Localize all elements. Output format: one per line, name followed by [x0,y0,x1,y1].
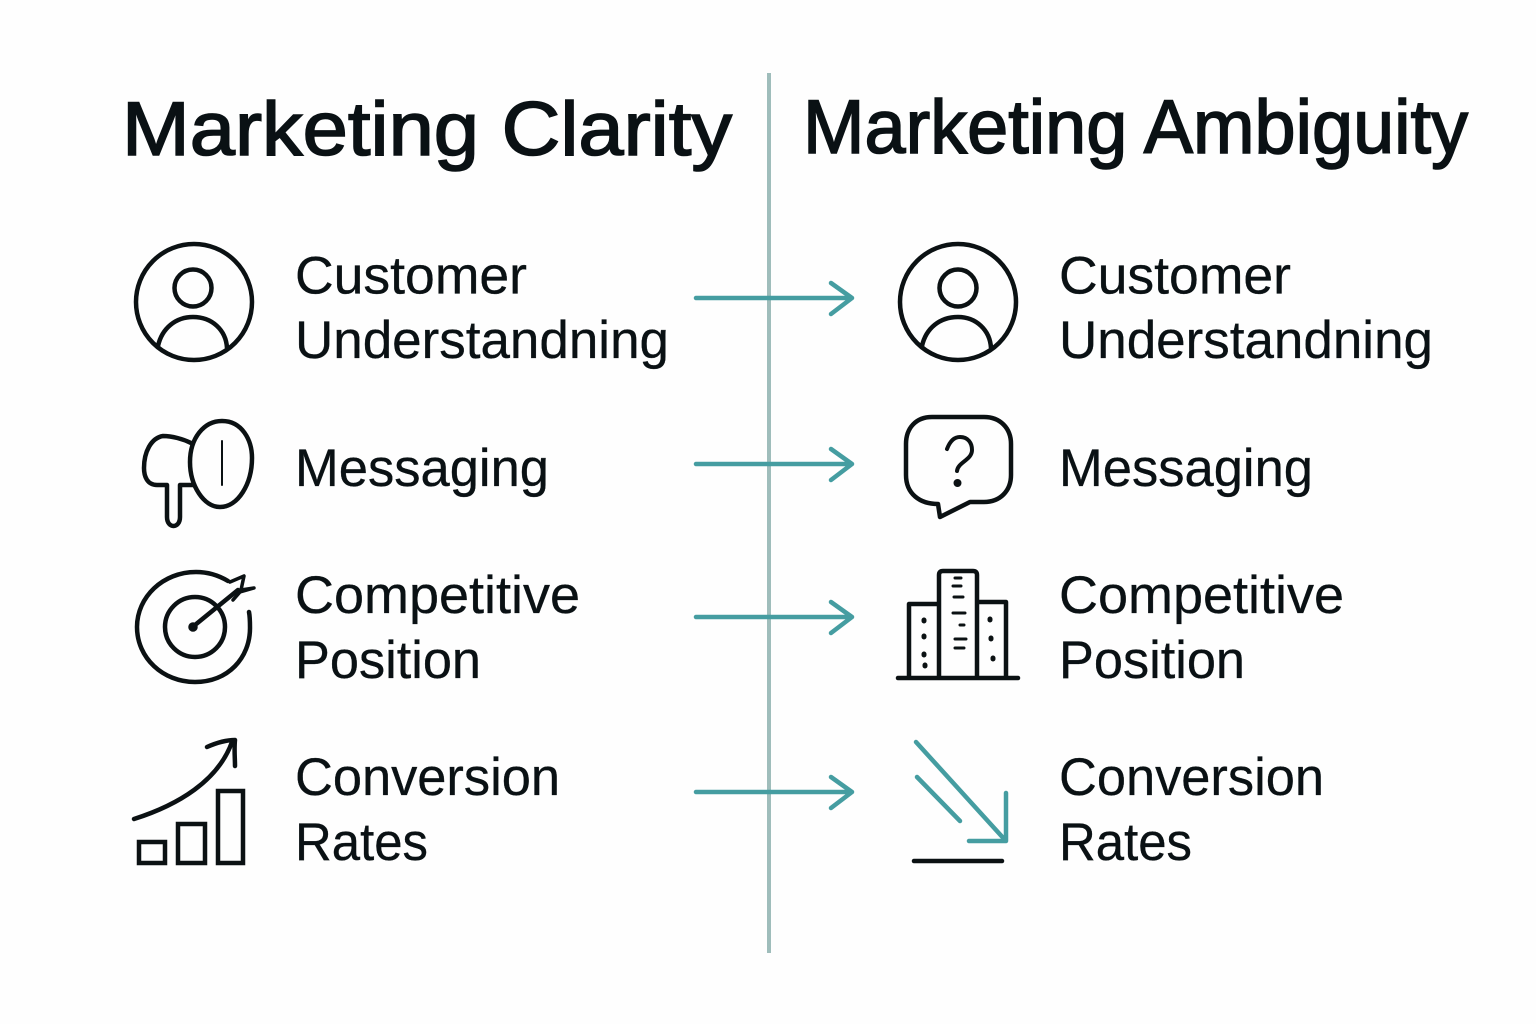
label: Customer Understandning [295,246,669,370]
label: Conversion Rates [295,748,560,872]
label: Conversion Rates: Rates [1059,813,1192,872]
label: Conversion Rates: Rates [295,813,428,872]
label: Messaging: Messaging [1059,439,1313,498]
panel: clarity column [134,244,669,872]
label: Competitive Position: Competitive [295,566,580,625]
label: Customer Understandning: Understandning [1059,311,1433,370]
label: Messaging: Messaging [295,439,549,498]
title: Marketing Ambiguity: Marketing Ambiguity [803,85,1468,170]
arrow: competitive position [696,602,852,633]
icon: customer [136,244,252,360]
icon: speech bubble with question mark [906,417,1011,517]
icon: megaphone messaging [144,421,252,526]
label: Customer Understandning: Customer [1059,246,1291,306]
title: Marketing Clarity: Marketing Clarity [122,87,732,172]
label: Competitive Position [1059,566,1344,690]
divider [767,73,771,953]
label: Competitive Position: Competitive [1059,566,1344,625]
arrow: customer understanding [696,283,852,314]
icon: customer [900,244,1016,360]
label: Competitive Position [295,566,580,690]
label: Customer Understandning: Understandning [295,311,669,370]
icon: rising bars [134,740,243,863]
icon: office buildings [898,571,1018,678]
arrow: conversion rates [696,777,852,808]
label: Conversion Rates [1059,748,1324,872]
panel: arrows [696,283,852,808]
label: Competitive Position: Position [1059,631,1245,690]
icon: target with arrow [137,572,254,682]
panel: ambiguity column [898,244,1433,872]
label: Conversion Rates: Conversion [295,748,560,807]
label: Customer Understandning: Customer [295,246,527,306]
arrow: messaging [696,449,852,480]
label: Conversion Rates: Conversion [1059,748,1324,807]
label: Customer Understandning [1059,246,1433,370]
icon: falling arrow [914,742,1006,861]
label: Competitive Position: Position [295,631,481,690]
